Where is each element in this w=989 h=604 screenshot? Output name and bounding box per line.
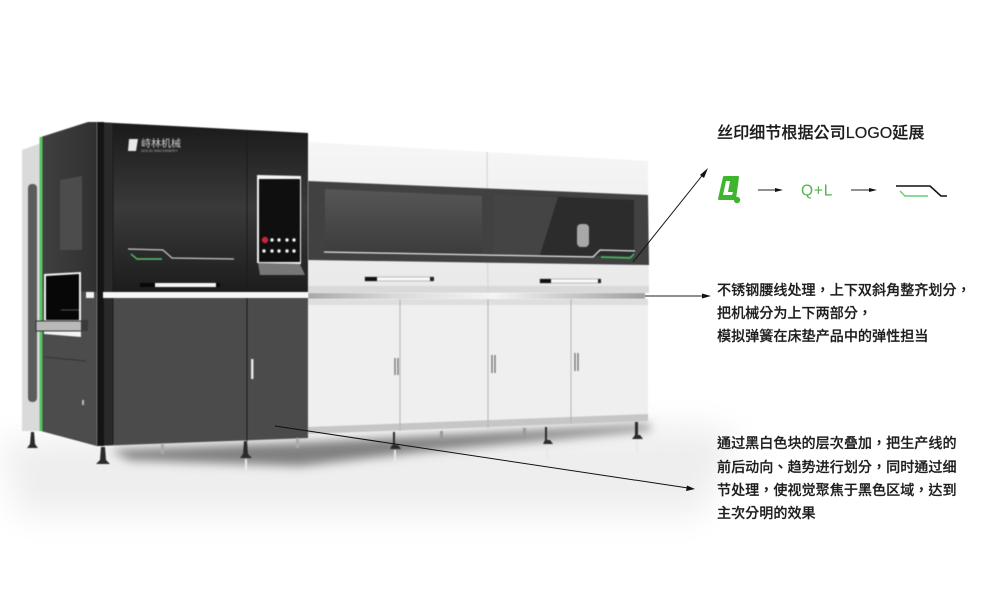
- right handle: [540, 279, 601, 283]
- machine: right line feet: [390, 422, 643, 464]
- right viewing window: [494, 194, 634, 256]
- text: colour block note: [717, 435, 957, 521]
- brand logo: 峙林机械: [141, 137, 181, 150]
- arrow: to colour block note: [275, 426, 695, 491]
- machine: black main unit side: [41, 122, 97, 446]
- front handle: [140, 283, 220, 287]
- text: colour block note: 节处理，使视觉聚焦于黑色区域，达到: [717, 482, 957, 498]
- icon: silk-screen line derived from logo: [896, 186, 947, 196]
- brand logo: [128, 137, 181, 153]
- floor reflection and shadow: [0, 424, 740, 515]
- heading: silk-screen detail: 丝印细节根据公司LOGO延展: [717, 124, 924, 142]
- window silk-screen line: [324, 250, 635, 257]
- text: waist line note: [717, 282, 971, 344]
- machine: grey rear side panel: [22, 143, 41, 431]
- arrow: letters to line: [851, 188, 877, 192]
- arrow: to waist line note: [645, 294, 711, 298]
- silk-screen line: [128, 249, 234, 259]
- control touchscreen: [257, 175, 305, 275]
- window sensor: [577, 224, 589, 247]
- text: colour block note: 通过黑白色块的层次叠加，把生产线的: [717, 435, 957, 451]
- black window band: [308, 181, 649, 265]
- text: waist line note: 不锈钢腰线处理，上下双斜角整齐划分，: [717, 282, 971, 298]
- machine: stainless waist line: [308, 293, 645, 299]
- arrow: to logo detail: [633, 168, 708, 262]
- arrow: logo to letters: [758, 188, 783, 192]
- white waist band: [103, 292, 308, 298]
- text: waist line note: 模拟弹簧在床垫产品中的弹性担当: [717, 328, 928, 344]
- cabinet handles: [395, 353, 578, 375]
- icon: company logo: [719, 177, 740, 203]
- machine: black main unit front: [97, 122, 308, 446]
- text: colour block note: 前后动向、趋势进行划分，同时通过细: [717, 459, 957, 475]
- brand logo: SOLID MACHINERY: [141, 148, 178, 153]
- door handle: [251, 359, 254, 379]
- machine: main unit feet: [27, 432, 299, 479]
- machine: white line body, upper section: [308, 142, 649, 293]
- control buttons: [262, 237, 296, 253]
- machine: white line lower cabinets: [308, 299, 648, 434]
- text: colour block note: 主次分明的效果: [717, 505, 816, 521]
- left handle: [365, 277, 434, 281]
- machine: side loading window: [36, 272, 94, 337]
- label: Q+L: Q+L: [801, 182, 833, 200]
- left viewing window: [325, 189, 482, 254]
- text: waist line note: 把机械分为上下两部分，: [717, 305, 872, 321]
